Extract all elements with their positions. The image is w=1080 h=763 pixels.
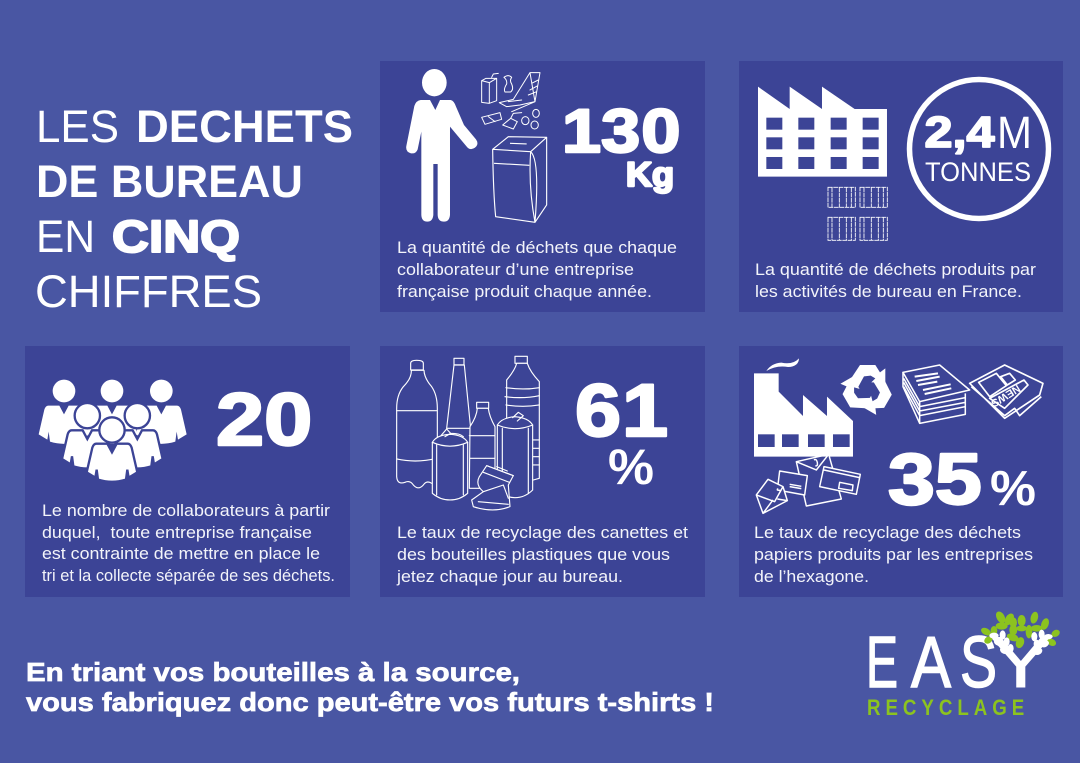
title: LES — [36, 101, 119, 152]
stat circle: 2,4M tonnes: TONNES — [925, 157, 1031, 187]
stat circle: 2,4M tonnes — [910, 80, 1048, 218]
logo subtitle: RECYCLAGE — [867, 697, 1024, 720]
title: DE BUREAU — [36, 156, 303, 207]
panel: 35% — [739, 346, 1063, 597]
description text — [42, 501, 335, 585]
stat unit: percent: % — [608, 439, 654, 495]
panel: 61% — [380, 346, 705, 597]
description text: papiers produits par les entreprises — [754, 545, 1033, 564]
title: EN — [36, 211, 95, 262]
description text: Le taux de recyclage des déchets — [754, 523, 1021, 542]
icon: waste items — [482, 73, 540, 129]
title: CINQ — [112, 211, 240, 262]
panel: 2,4M tonnes — [739, 61, 1063, 312]
icon: smoking factory — [754, 358, 853, 457]
description text: La quantité de déchets que chaque — [397, 238, 677, 257]
logo wordmark: E — [866, 623, 898, 703]
stat circle: 2,4M tonnes: 2,4 — [924, 108, 995, 157]
title: DECHETS — [136, 101, 353, 152]
icon: office worker — [406, 69, 477, 222]
closing message: vous fabriquez donc peut-être vos futurs t-shirts ! — [26, 687, 714, 717]
logo: Easy Recyclage — [866, 610, 1061, 720]
description text: des bouteilles plastiques que vous — [397, 545, 670, 564]
description text — [397, 238, 677, 301]
icon: bottles and cans — [397, 356, 539, 510]
description text: duquel, toute entreprise française — [42, 523, 312, 542]
stat: 35: 35 — [888, 439, 982, 520]
description text: Le taux de recyclage des canettes et — [397, 523, 688, 542]
description text: est contrainte de mettre en place le — [42, 544, 320, 563]
description text: collaborateur d’une entreprise — [397, 260, 634, 279]
icon: envelopes — [756, 454, 860, 513]
stat unit: Kg: Kg — [626, 156, 674, 194]
logo wordmark: S — [960, 623, 997, 703]
description text: Le nombre de collaborateurs à partir — [42, 501, 330, 520]
logo tree Y — [980, 610, 1061, 703]
closing message — [26, 657, 714, 717]
title: CHIFFRES — [35, 266, 262, 317]
description text — [755, 260, 1036, 301]
icon: recycling symbol — [838, 365, 897, 417]
stat: 61: 61 — [575, 369, 668, 452]
icon: newspapers — [970, 365, 1043, 418]
stat circle: 2,4M tonnes: M — [997, 107, 1032, 158]
panel: 20 collaborateurs — [25, 346, 350, 597]
description text: jetez chaque jour au bureau. — [396, 567, 623, 586]
icon: stack of paper — [903, 365, 970, 423]
logo tree Y: Y — [988, 622, 1053, 703]
description text — [396, 523, 688, 586]
description text: de l’hexagone. — [754, 567, 869, 586]
description text: les activités de bureau en France. — [755, 282, 1022, 301]
logo wordmark: A — [911, 623, 951, 703]
stat unit: percent: % — [990, 462, 1036, 516]
description text: française produit chaque année. — [397, 282, 652, 301]
description text — [754, 523, 1033, 586]
stat: 130: 130 — [562, 96, 680, 165]
newspaper headline: NEWS — [989, 382, 1022, 409]
description text: La quantité de déchets produits par — [755, 260, 1036, 279]
icon: waste bales — [828, 187, 887, 240]
closing message: En triant vos bouteilles à la source, — [26, 657, 520, 687]
description text: tri et la collecte séparée de ses déchets. — [42, 566, 335, 585]
icon: group of people — [39, 380, 187, 482]
title — [35, 101, 353, 317]
icon: factory — [758, 87, 887, 177]
icon: recycling bin — [493, 137, 547, 222]
stat: 20: 20 — [216, 379, 312, 462]
logo wordmark — [866, 623, 997, 703]
panel: 130 Kg — [380, 61, 705, 312]
